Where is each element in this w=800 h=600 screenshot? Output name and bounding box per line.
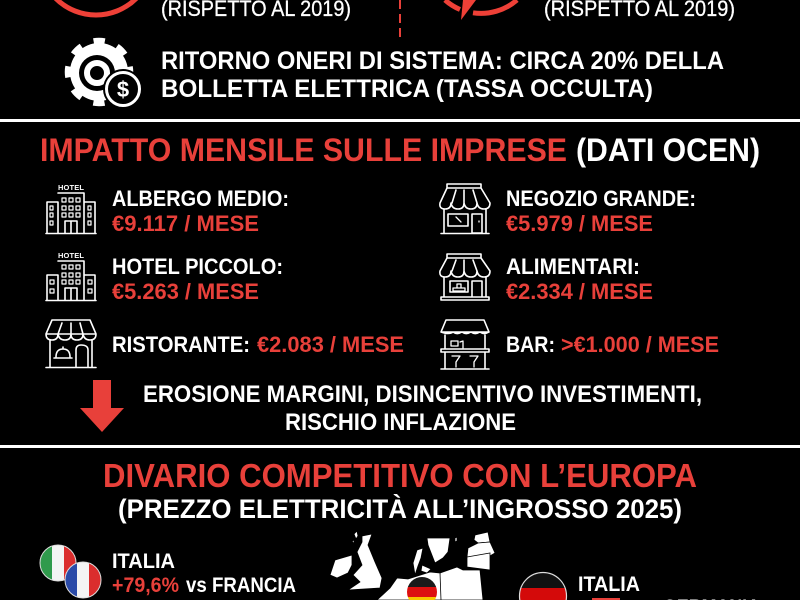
text: albergo medio: ALBERGO MEDIO: bbox=[112, 186, 289, 211]
text: consequences bbox=[143, 381, 702, 436]
text: ristorante: RISTORANTE: bbox=[112, 332, 250, 357]
text: albergo medio bbox=[112, 186, 289, 236]
text: system charges: BOLLETTA ELETTRICA (TASSA OCCULTA) bbox=[161, 75, 653, 103]
icon: red down arrow bbox=[80, 380, 124, 432]
text: alimentari: ALIMENTARI: bbox=[506, 254, 640, 279]
icon: gear with dollar coin bbox=[68, 42, 143, 109]
text: hotel piccolo: €5.263 / MESE bbox=[112, 279, 259, 304]
icon: Germany flag on map bbox=[407, 577, 437, 600]
text: alimentari bbox=[506, 254, 653, 304]
heading: competitive gap with Europe: DIVARIO COMPETITIVO CON L’EUROPA bbox=[103, 457, 697, 494]
text: Italy vs France: +79,6% bbox=[112, 574, 179, 597]
text: hotel piccolo: HOTEL PICCOLO: bbox=[112, 254, 283, 279]
heading: monthly impact on businesses: IMPATTO MENSILE SULLE IMPRESE bbox=[40, 132, 567, 168]
text: albergo medio: €9.117 / MESE bbox=[112, 211, 259, 236]
icon: grocery bbox=[440, 254, 490, 300]
icon: restaurant bbox=[46, 320, 96, 368]
text: consequences: RISCHIO INFLAZIONE bbox=[285, 409, 516, 436]
text: system charges: RITORNO ONERI DI SISTEMA: CIRCA 20% DELLA bbox=[161, 47, 724, 75]
text: Italy vs France: vs FRANCIA bbox=[186, 574, 296, 597]
heading: competitive gap with Europe: (PREZZO ELETTRICITÀ ALL’INGROSSO 2025) bbox=[118, 493, 682, 524]
icon: gear with dollar coin: $ bbox=[117, 77, 129, 102]
text: negozio grande: €5.979 / MESE bbox=[506, 211, 653, 236]
icon: red ring, cropped at top left bbox=[39, 0, 153, 15]
text: consequences: EROSIONE MARGINI, DISINCENTIVO INVESTIMENTI, bbox=[143, 381, 702, 408]
text: system charges bbox=[161, 47, 724, 103]
text: Italy vs Germany, cropped at bottom edge bbox=[578, 573, 760, 600]
icon: bar bbox=[441, 320, 489, 369]
text: hotel piccolo bbox=[112, 254, 283, 304]
text: ristorante bbox=[112, 332, 404, 357]
icon: Germany flag large bbox=[519, 572, 567, 600]
text: Italy vs France bbox=[112, 550, 296, 597]
text: bar: >€1.000 / MESE bbox=[561, 332, 719, 357]
icon: large shop bbox=[440, 184, 490, 234]
text: bar: BAR: bbox=[506, 332, 555, 357]
map: Europe silhouette bbox=[330, 531, 495, 600]
text: negozio grande bbox=[506, 186, 696, 236]
icon: hotel medium: HOTEL bbox=[58, 183, 84, 192]
icon: hotel small: HOTEL bbox=[58, 251, 84, 260]
icon: France flag bbox=[65, 562, 101, 598]
icon: hotel medium bbox=[46, 183, 96, 234]
text: Italy vs Germany, cropped at bottom edge: ITALIA bbox=[578, 573, 640, 596]
icon: hotel small bbox=[46, 251, 96, 300]
icon: Italy flag bbox=[40, 545, 76, 581]
text: ristorante: €2.083 / MESE bbox=[257, 332, 404, 357]
text: Italy vs France: ITALIA bbox=[112, 550, 175, 573]
icon: red ring with lightning bolt, cropped at top bbox=[445, 0, 517, 20]
text: alimentari: €2.334 / MESE bbox=[506, 279, 653, 304]
text: negozio grande: NEGOZIO GRANDE: bbox=[506, 186, 696, 211]
divider: red dashed vertical line bbox=[399, 0, 401, 40]
heading: competitive gap with Europe bbox=[103, 457, 697, 524]
heading: monthly impact on businesses: (DATI OCEN) bbox=[576, 132, 760, 168]
